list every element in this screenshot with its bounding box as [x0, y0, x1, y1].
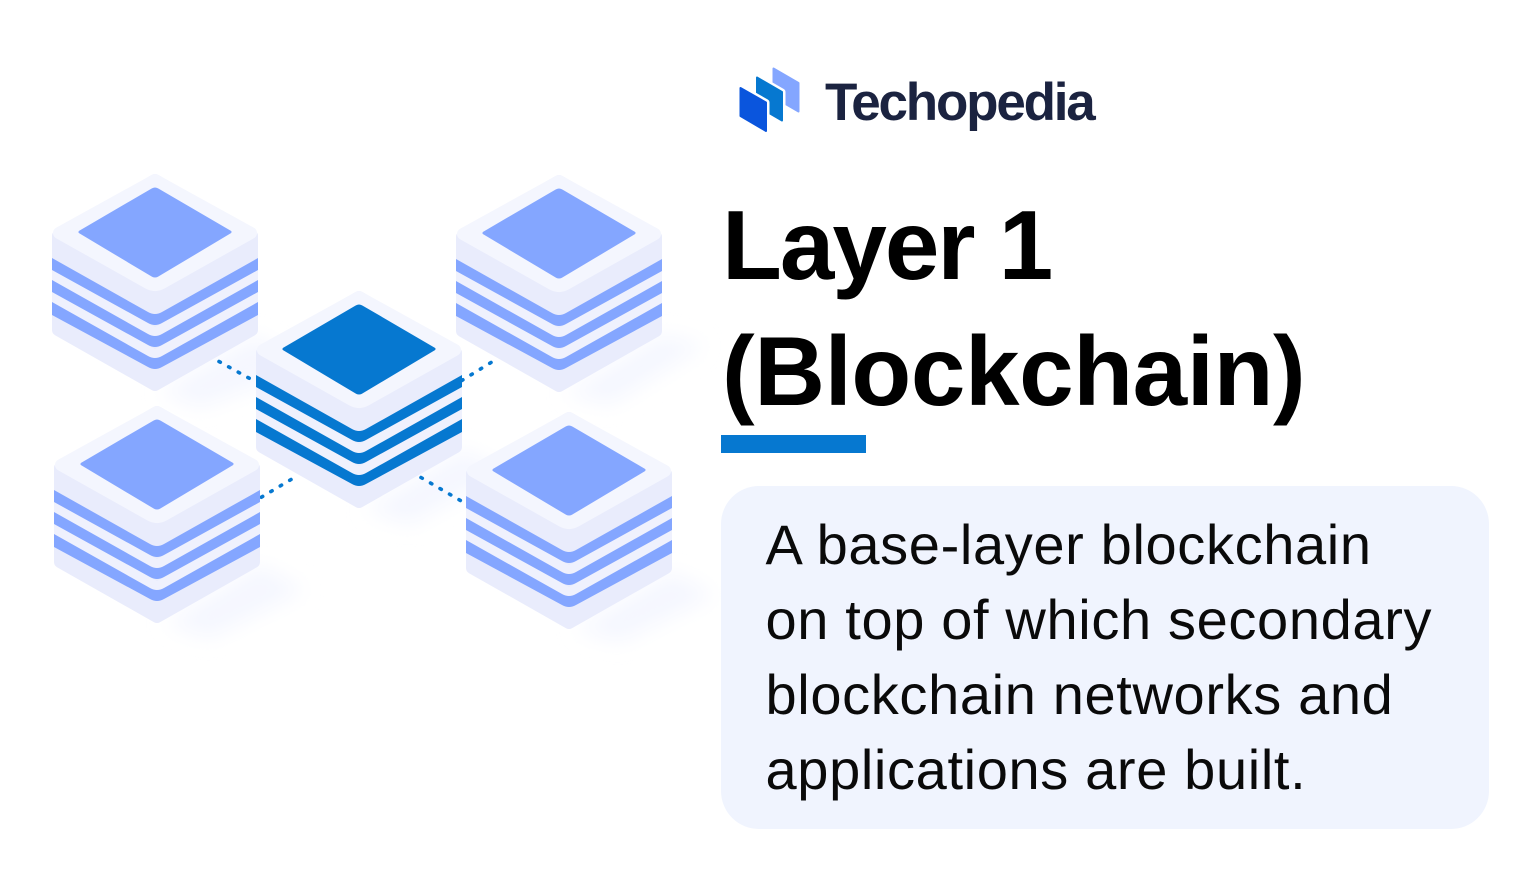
logo wordmark: Techopedia	[825, 73, 1094, 132]
block: top left	[52, 180, 258, 385]
definition text: on top of which secondary	[766, 588, 1432, 651]
panel: definition	[721, 486, 1489, 829]
block: bottom right	[466, 418, 672, 623]
definition text: applications are built.	[766, 738, 1306, 801]
block: centre	[256, 297, 462, 502]
dotted connectors	[219, 362, 491, 502]
title	[722, 190, 1305, 426]
title line 2: (Blockchain)	[722, 316, 1305, 426]
definition text	[766, 513, 1432, 801]
logo: Techopedia	[740, 68, 1096, 132]
definition text: A base-layer blockchain	[766, 513, 1372, 576]
title line 1: Layer 1	[722, 190, 1051, 300]
block: top right	[456, 181, 662, 386]
icon: logo layers	[740, 68, 800, 132]
soft block shadows	[160, 335, 715, 642]
title underline	[721, 435, 866, 453]
definition text: blockchain networks and	[766, 663, 1393, 726]
block: bottom left	[54, 412, 260, 617]
